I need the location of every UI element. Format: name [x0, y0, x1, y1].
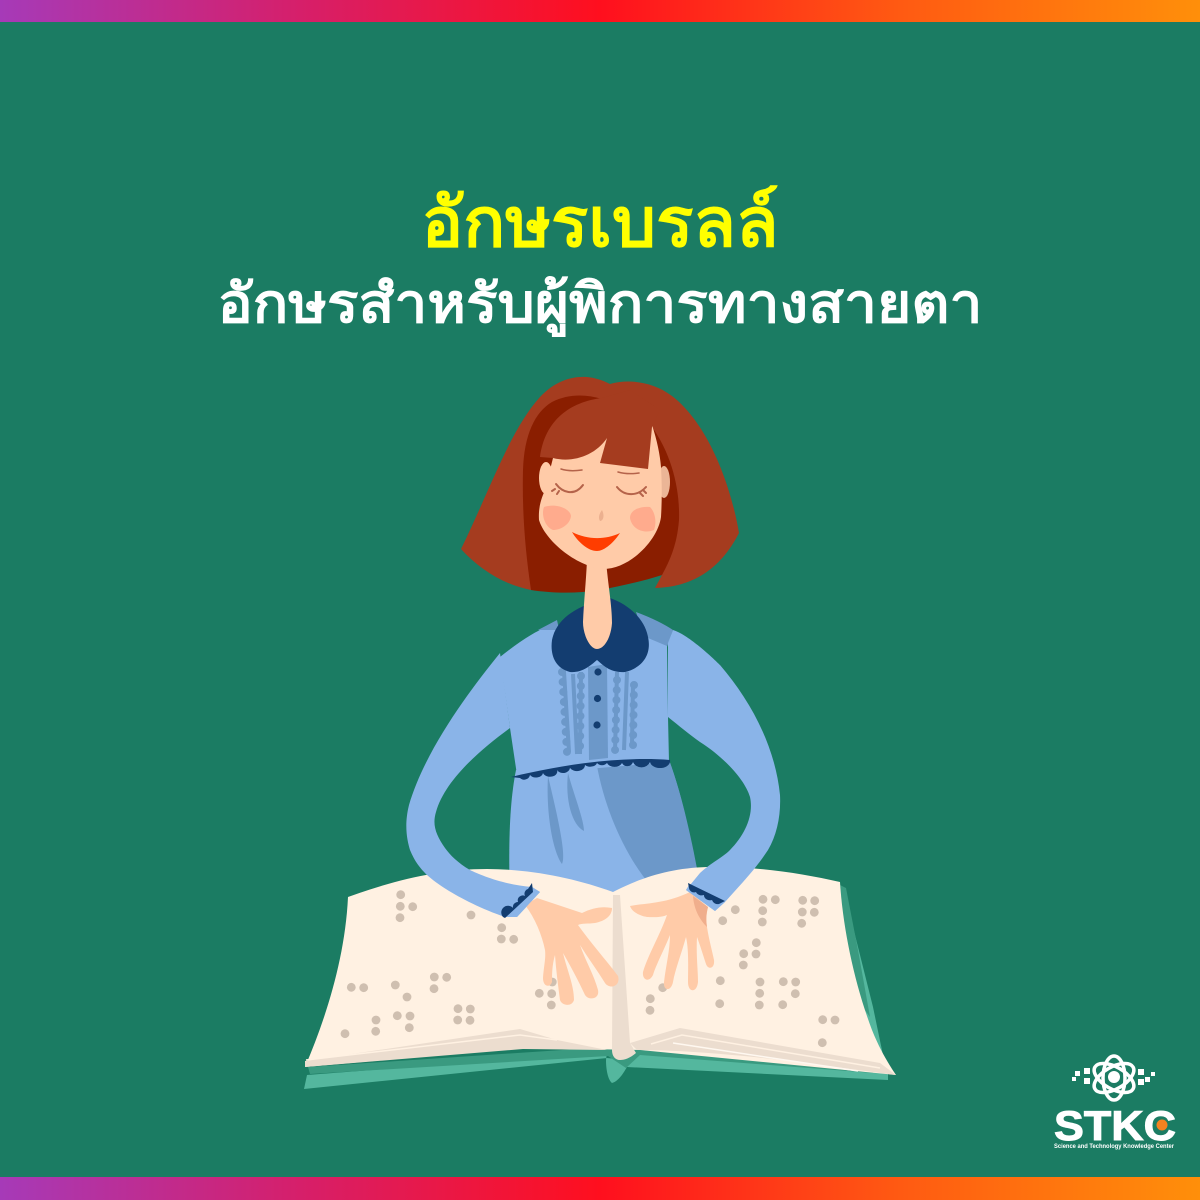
right cuff: [686, 885, 725, 911]
braille dots: [341, 890, 839, 1047]
placket: [588, 664, 608, 760]
skirt shadow: [597, 760, 700, 885]
book gutter: [612, 895, 636, 1060]
book pages: [305, 867, 896, 1075]
eyes and brows: [552, 469, 646, 496]
buttons: [593, 668, 602, 729]
logo wordmark: STKC: [1054, 1102, 1176, 1149]
logo atom dots: [1072, 1068, 1155, 1085]
right sleeve: [668, 630, 780, 911]
title: อักษรเบรลล์: [422, 185, 778, 261]
page stack right: [630, 1028, 896, 1075]
bottom gradient bar: [0, 1177, 1200, 1200]
right hand shadow: [693, 896, 708, 927]
ruffles: [562, 672, 634, 754]
nose: [599, 510, 603, 521]
left sleeve: [406, 653, 540, 917]
hair: [461, 377, 739, 593]
neck: [583, 560, 612, 649]
logo orange dot: [1156, 1120, 1168, 1130]
bangs: [540, 390, 660, 469]
cheeks: [543, 506, 655, 532]
page edge lines: [306, 1035, 880, 1071]
logo tagline: Science and Technology Knowledge Center: [1054, 1144, 1175, 1150]
mouth: [572, 532, 620, 551]
face: [539, 425, 662, 569]
left cuff scallops: [501, 883, 533, 918]
right ear: [658, 466, 670, 498]
torso back yoke: [538, 612, 673, 647]
skirt: [509, 760, 700, 900]
collar: [552, 598, 649, 672]
belt: [511, 759, 670, 780]
right cuff scallops: [688, 883, 725, 904]
top gradient bar: [0, 0, 1200, 22]
left cuff: [505, 887, 540, 917]
logo atom icon: [1089, 1056, 1139, 1100]
illustration: woman reading braille book: [304, 377, 896, 1089]
skirt folds: [548, 773, 584, 864]
logo: STKC: [1054, 1056, 1176, 1150]
right hand: [630, 892, 714, 990]
subtitle: อักษรสำหรับผู้พิการทางสายตา: [218, 274, 982, 337]
left hand: [525, 898, 619, 1005]
page stack left: [305, 1029, 607, 1067]
teal book cover: [304, 885, 888, 1089]
bodice: [500, 630, 669, 775]
left ear: [539, 462, 553, 494]
